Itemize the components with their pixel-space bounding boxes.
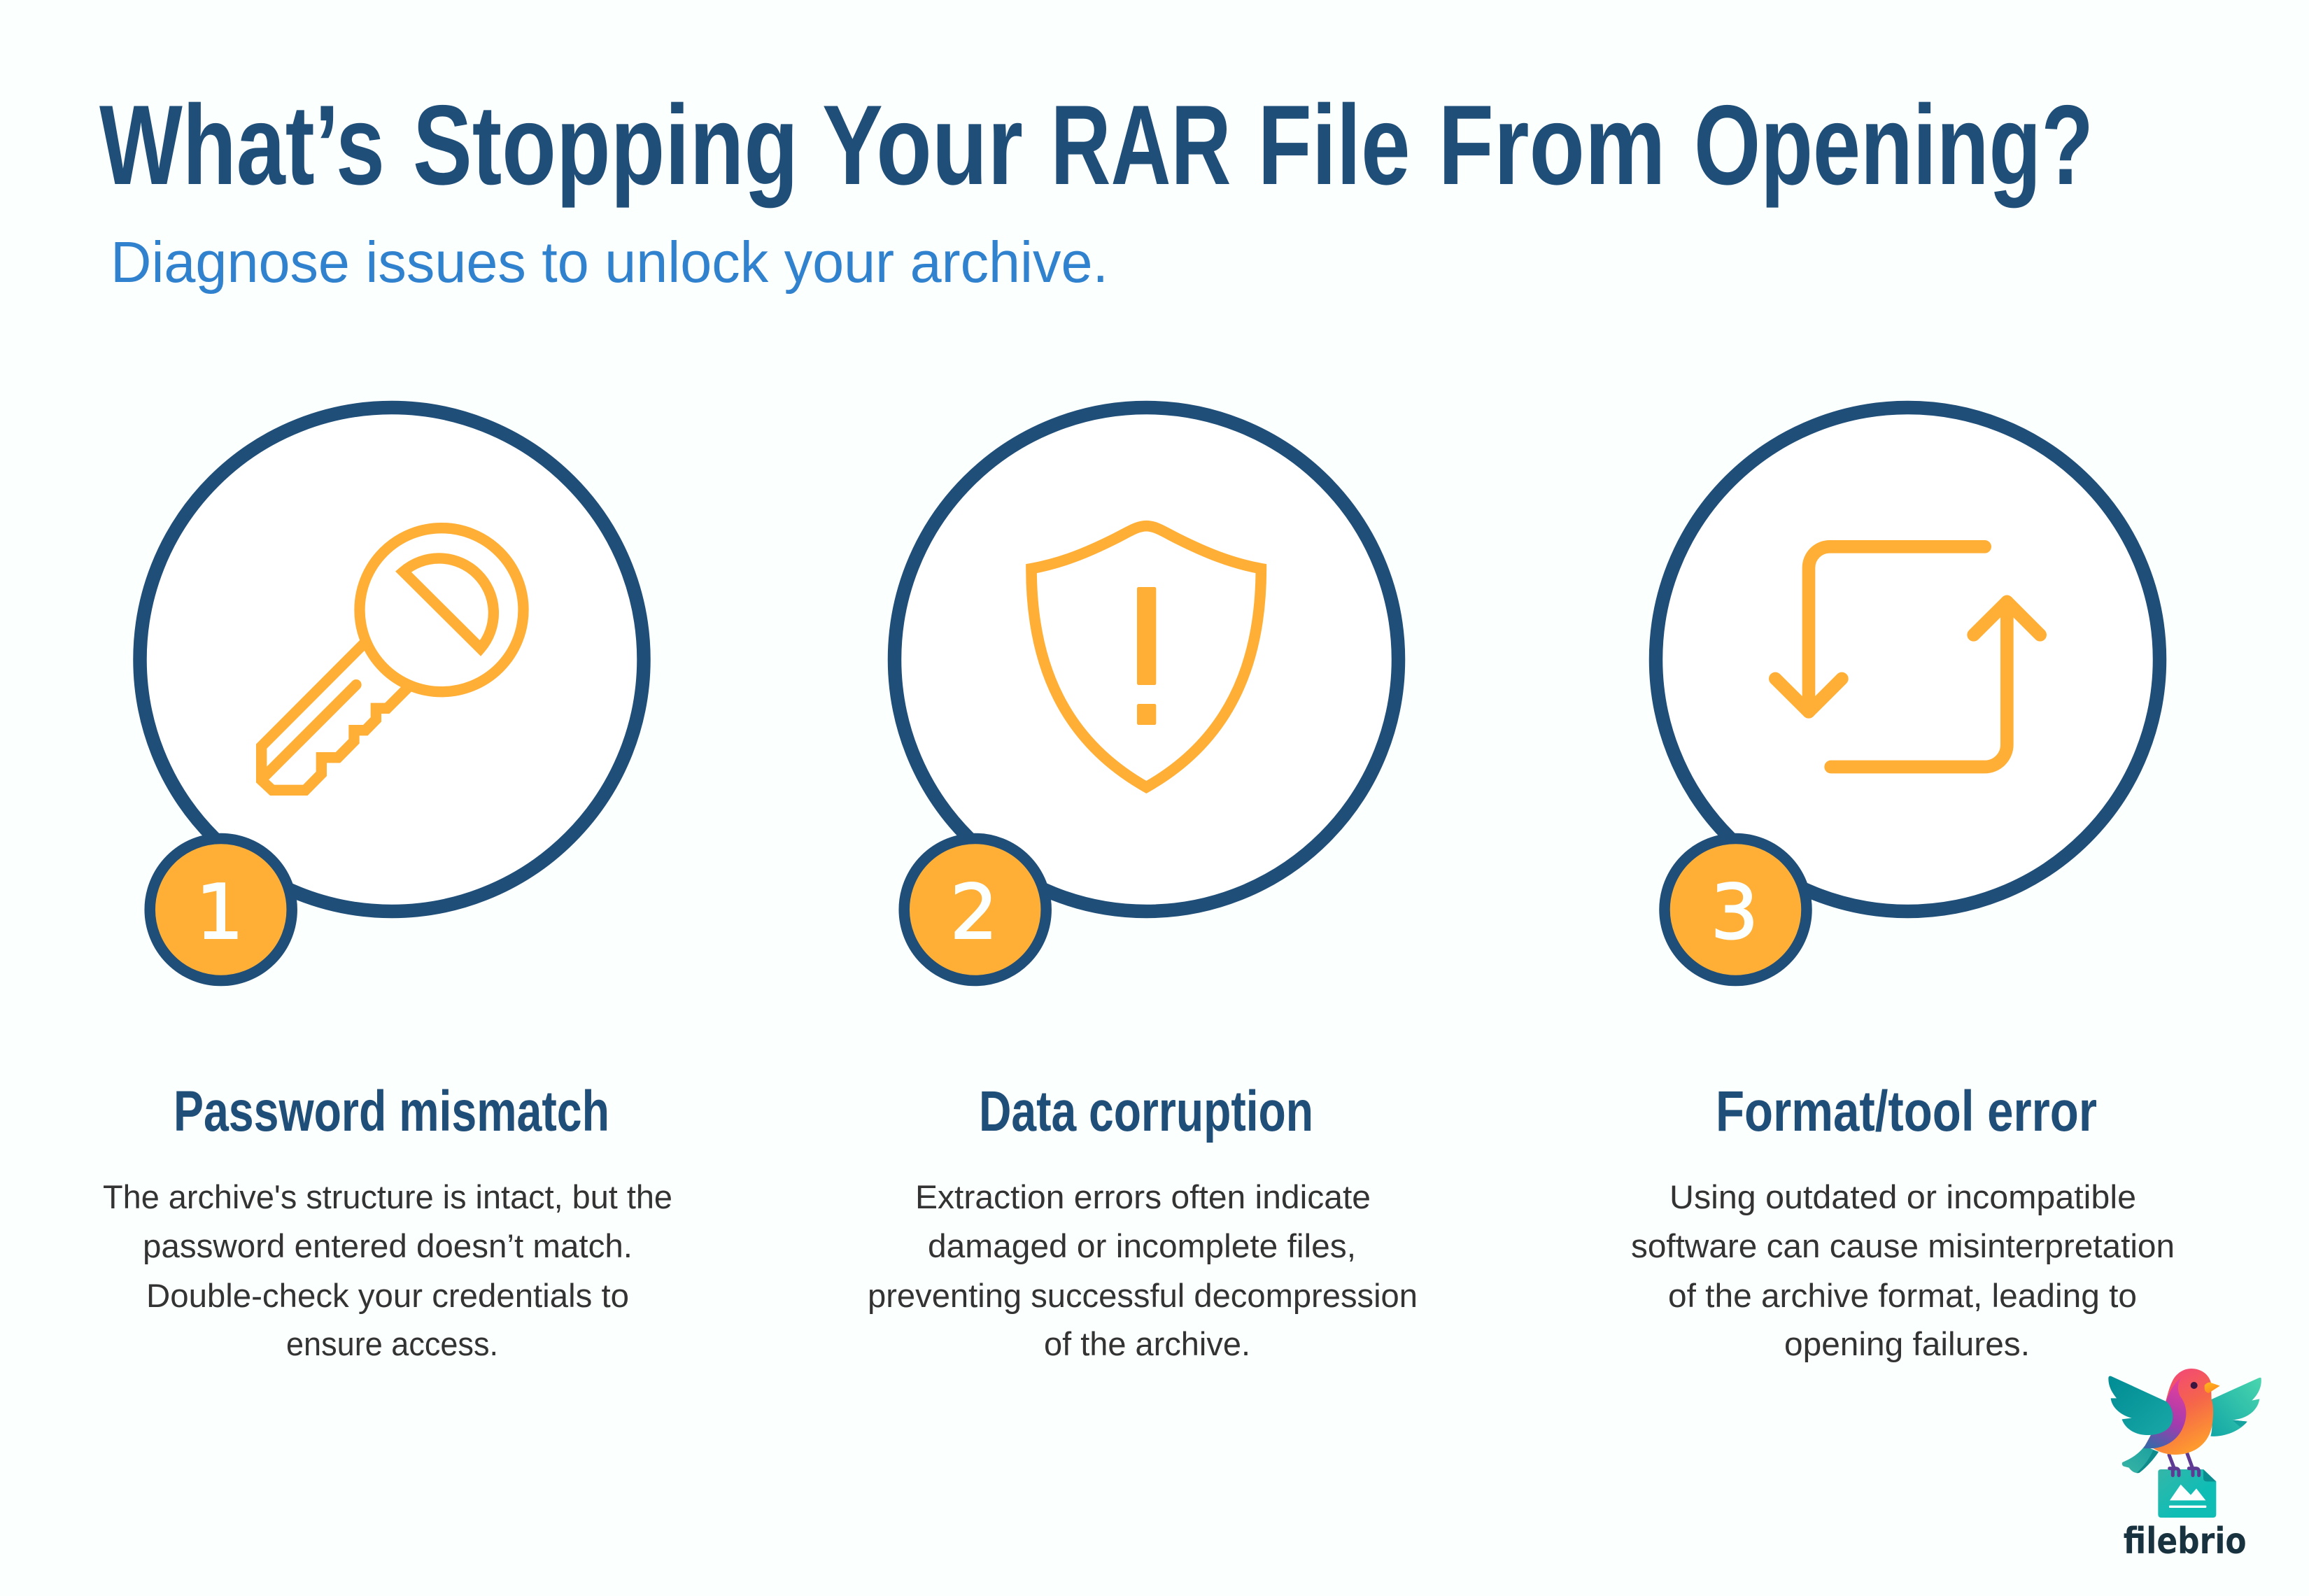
title: Your — [822, 82, 1023, 209]
circle: shield — [894, 407, 1398, 911]
description: data corruption: damaged or incomplete files, — [928, 1227, 1356, 1264]
description: password mismatch: Double-check your credentials to — [146, 1277, 629, 1314]
description: password mismatch: ensure access. — [286, 1325, 498, 1362]
badge: number 2: 2 — [950, 869, 998, 956]
logo: filebrio — [2108, 1369, 2261, 1562]
heading: password mismatch: Password mismatch — [174, 1080, 609, 1143]
description: data corruption: of the archive. — [1044, 1325, 1250, 1362]
badge: number 1: 1 — [196, 869, 243, 956]
badge: number 3 — [1665, 838, 1807, 981]
title — [99, 82, 2093, 209]
description: format/tool error: opening failures. — [1784, 1325, 2030, 1362]
circle: swap arrows — [1655, 407, 2159, 911]
icon: file — [2158, 1469, 2216, 1518]
title: Stopping — [413, 82, 798, 209]
badge: number 2 — [904, 838, 1046, 981]
title: Opening? — [1694, 82, 2093, 209]
circle: key — [140, 407, 644, 911]
icon: swap arrows — [1775, 546, 2040, 767]
description: data corruption: Extraction errors often indicate — [915, 1178, 1371, 1215]
title: From — [1439, 82, 1665, 209]
heading: data corruption: Data corruption — [979, 1080, 1313, 1143]
panel: format/tool error — [1631, 407, 2175, 1362]
panel: password mismatch — [103, 407, 672, 1362]
description: password mismatch — [103, 1178, 672, 1362]
description: password mismatch: The archive's structure is intact, but the — [103, 1178, 672, 1215]
badge: number 3: 3 — [1711, 869, 1758, 956]
badge: number 1 — [150, 838, 292, 981]
title: File — [1258, 82, 1411, 209]
title: What’s — [99, 82, 385, 209]
subtitle: Diagnose issues to unlock your archive. — [111, 229, 1108, 295]
description: format/tool error: Using outdated or incompatible — [1669, 1178, 2136, 1215]
description: data corruption: preventing successful decompression — [868, 1277, 1418, 1314]
description: format/tool error: of the archive format, leading to — [1668, 1277, 2137, 1314]
description: format/tool error — [1631, 1178, 2175, 1362]
title: RAR — [1051, 82, 1231, 209]
icon: bird — [2108, 1369, 2261, 1476]
heading: format/tool error: Format/tool error — [1716, 1080, 2097, 1143]
icon: key — [262, 528, 523, 790]
wordmark: filebrio: filebrio — [2124, 1520, 2247, 1562]
description: password mismatch: password entered doesn’t match. — [143, 1227, 633, 1264]
panel: data corruption — [868, 407, 1418, 1362]
description: format/tool error: software can cause misinterpretation — [1631, 1227, 2175, 1264]
icon: shield with exclamation mark — [1031, 526, 1261, 787]
description: data corruption — [868, 1178, 1418, 1362]
